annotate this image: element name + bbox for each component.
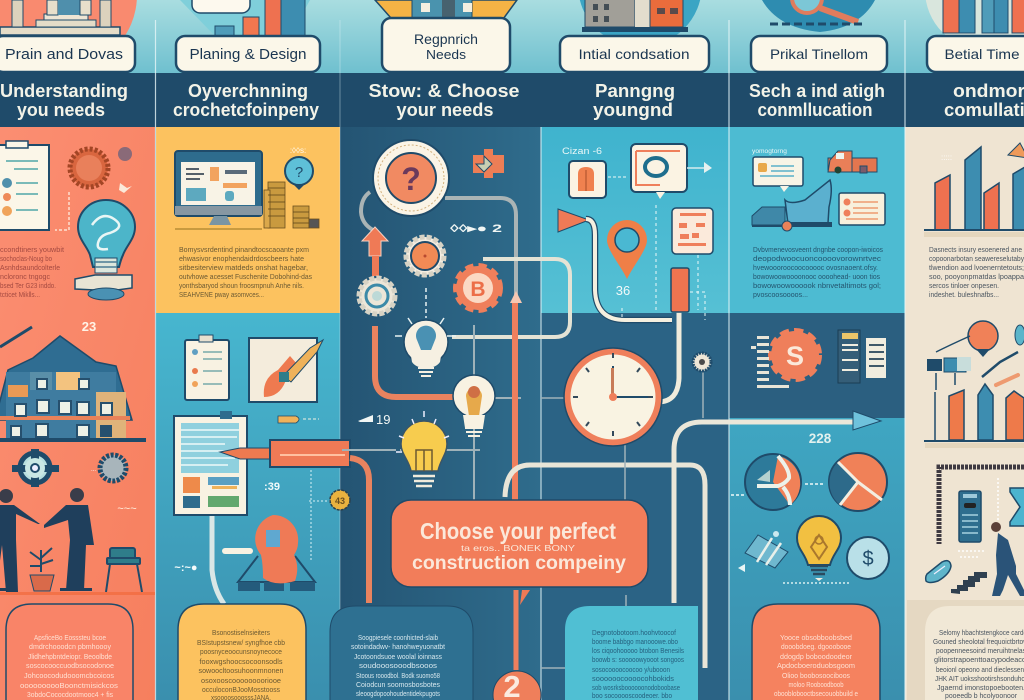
icon: document with clip: [174, 411, 247, 515]
panel: column 4 bottom card: boowb s: sooooowyooot songoos: [592, 657, 684, 664]
icon: dark gear with dollar: [771, 331, 819, 379]
text block: column 1 description: bsed Ter G23 inddo.: [0, 283, 56, 290]
illustration: houses: [0, 336, 146, 442]
panel: centre call-out card: construction compeiny: [412, 553, 626, 574]
icon: small gear badge: [693, 353, 711, 371]
label card: Betial Time: Betial Time: [944, 46, 1020, 62]
pie chart: right: [829, 453, 887, 511]
panel: column 5 navy middle: [729, 313, 905, 418]
heading: column 5: Sech a ind atigh: [749, 81, 885, 101]
icon: speech card yellow: [753, 157, 803, 192]
coral pipe: centre vertical: [512, 300, 518, 500]
icon: potted plant: [30, 548, 54, 591]
number: 228: 228: [809, 431, 832, 446]
panel: column 1 bottom card: oooooooooBoonctmisickcos: [20, 683, 119, 690]
text block: column 4/5 description: [753, 247, 883, 299]
panel: column 4 bottom card: boo socooooscoodeoer. bbo: [592, 693, 672, 700]
panel: column 2 teal lower: [156, 313, 340, 700]
icon: question pin: [285, 157, 313, 190]
frame: dotted dark L: [939, 467, 1024, 544]
label card: Regpnrich Needs: Needs: [426, 47, 467, 62]
panel: column 1 bottom card: ApsficeBo Eosssteu bcoe: [34, 635, 106, 642]
panel: column 6 bottom card: pooeedb b hcolyoonoor: [945, 693, 1018, 700]
heading: column 6: [944, 81, 1024, 120]
panel: column 1 bottom card: 3obdoCococdootmooc4 + fis: [27, 692, 113, 699]
shelf shadow: [924, 232, 1024, 237]
icon: blue hourglass: [1010, 488, 1024, 526]
panel: column 4 bottom card: los ciqoohooooo btobon Benesils: [592, 648, 684, 655]
icon: small tag: [358, 415, 373, 422]
icon: coral pencil block: [220, 440, 350, 467]
icon: blue panels: [738, 531, 788, 572]
icon: gears pair: ...: [91, 467, 96, 473]
heading: column 2: crochetcfoinpeny: [173, 100, 319, 120]
icon: yellow gear badge: [330, 490, 350, 510]
label card: Betial Time: [927, 36, 1024, 72]
text block: column 2 description: yonthsbaryod shoun froosmpnuh Anhe nils.: [179, 283, 304, 290]
panel: column 5 bottom card: dooobdoeg. dgooobooe: [781, 644, 851, 651]
dotted line: [783, 582, 851, 584]
panel: column 5 bottom card: Apdocboeroduobsgoom: [777, 663, 855, 670]
panel: column 5 bottom card: Olioo boobosoociboos: [782, 673, 850, 680]
panel: column 1 coral body: [0, 127, 155, 700]
panel: column 2 yellow upper: [156, 127, 340, 313]
top illustration: column 6 bars: [925, 0, 1024, 50]
icon: list blocks right: [838, 330, 886, 383]
icon: clipboard checklist: [0, 141, 49, 230]
clock: [564, 348, 662, 446]
label card: Prikal Tinellom: Prikal Tinellom: [770, 46, 868, 62]
label card: Planing & Design: [176, 36, 320, 72]
illustration: two people shaking hands: [0, 488, 94, 592]
icon: bricks card: [672, 208, 713, 254]
dashed connector: [731, 484, 825, 495]
icon: gold bulb: [797, 516, 841, 581]
squiggle note: :◊◊s:: [290, 146, 306, 155]
panel: column 1 bottom card: dmdrchooodcn pbmhoooy: [29, 644, 111, 651]
label card: Regpnrich Needs: Regpnrich: [414, 31, 478, 47]
icon: flag triangle: [558, 209, 589, 232]
text block: column 6 description: soo, pooyonpmatdas lpoappa: [929, 274, 1024, 281]
panel: column 3 bottom card: Stoous rooodbol. Bodk suomo58: [356, 673, 440, 680]
icon: dollar coin: $: [862, 548, 874, 570]
panel: column 4 bottom card: soooooocoooocohbokids: [592, 676, 675, 683]
label card: Intial condsation: [560, 36, 709, 72]
panel: column 1 bottom card: [6, 604, 133, 700]
text block: column 2 description: [179, 247, 312, 299]
icon: map pin: [607, 220, 647, 279]
number: 23: 23: [82, 319, 96, 334]
heading: column 2: [173, 81, 319, 120]
top illustration: column 2 cloud and blocks: [180, 0, 310, 36]
text block: column 6 description: [929, 247, 1024, 299]
white pipe: coral block descending: [658, 312, 679, 402]
arrow head: [704, 162, 712, 173]
panel: column 2 bottom card: fooxwgshoocsocoonsodls: [200, 659, 283, 666]
number: note 2: ◊◊▸● 2: [450, 223, 502, 235]
small note: col 5: yomogtorng: [752, 149, 787, 155]
heading: column 5: conmllucation: [758, 100, 872, 120]
icon: pin and camera: [927, 321, 998, 390]
squiggle note: :::::: [941, 153, 952, 162]
panel: column 5 bottom card: obooblobooctbsecouobbuild e: [774, 691, 858, 698]
badge: number 2: [493, 669, 541, 700]
panel: column 2 bottom card: poosnyceoocunsnoynecoce: [200, 649, 282, 656]
coral pipe: left loop: [375, 326, 458, 397]
text block: column 1 description: Asnhdsaundcolterle: [0, 265, 60, 272]
text block: column 4/5 description: bowowoowoooook nbnvetaltimots gol;: [753, 283, 881, 290]
label card: Prain and Dovas: Prain and Dovas: [5, 47, 123, 63]
arrow head: centre: [510, 291, 522, 303]
background: top sky band: [0, 0, 1024, 73]
text block: column 4/5 description: pvoscoosoooos...: [753, 292, 808, 299]
panel: column 6 beige body: [905, 127, 1024, 700]
top illustration: column 5 magnifier: [762, 0, 875, 32]
icon: coral pin on stand: [225, 515, 315, 591]
dashed guides: col 4: [622, 205, 705, 320]
white pipe: document stem: [212, 516, 224, 604]
icon: stairs: [951, 572, 987, 594]
panel: column 6 bottom card: glitorstrapoenttoacypodeaco: [934, 657, 1024, 664]
top illustration: column 1 temple building: [0, 0, 137, 70]
icon: yellow gear badge: 43: [335, 496, 345, 506]
text block: column 6 description: indeshet. buleshnafbs...: [929, 292, 999, 299]
top illustration: column 3 house with roof: [375, 0, 517, 26]
label card: Regpnrich Needs: [382, 18, 510, 72]
panel: column 3 bottom card: sleoogdopoohoudentidekpugots: [356, 691, 440, 698]
panel: column 3 bottom card: soudooosooodbsooos: [359, 663, 438, 670]
text block: column 1 description: tcticet Miklls...: [0, 292, 40, 299]
icon: drawing card with brush: [249, 338, 323, 402]
panel: column 5 bottom card: Yooce obsobboobsbed: [780, 635, 852, 642]
coral block: [671, 268, 689, 312]
heading: column 3: [368, 81, 520, 120]
white pipe: flag route inner: [586, 219, 672, 320]
icon: mobile device: [959, 491, 981, 542]
panel: column 5 bottom card: ddogdp boboodoodeor: [780, 654, 853, 661]
text block: column 2 description: sitbesiterview matdeds onshat hagebar,: [179, 265, 308, 272]
heading: column 3: Stow: & Choose: [368, 81, 520, 101]
heading: column 3: your needs: [396, 100, 494, 120]
floor stripe: [0, 592, 155, 595]
heading: column 4: Panngng: [595, 81, 675, 101]
icon: small clipboard: [185, 335, 229, 400]
number: 19: 19: [376, 412, 390, 427]
text block: column 1 description: sochoclas-Noug bo: [0, 256, 52, 263]
icon: question pin: ?: [295, 164, 303, 181]
number: 36: 36: [616, 283, 630, 298]
panel: column 2 bottom card: BSIstupstsnew/ syngfhoe cbb: [197, 640, 285, 647]
panel: column 1 bottom card: Jlidhehpbntdeiopr. Beoolbde: [28, 654, 112, 661]
icon: dollar coin: [847, 537, 889, 579]
icon: coral gear with B: B: [470, 278, 486, 301]
panel: column 3 bottom card: Jcotoondsuoe woolal ioinnass: [354, 654, 442, 661]
label card: Planing & Design: Planing & Design: [190, 46, 306, 63]
panel: column 4 navy lower: [541, 313, 729, 700]
arrow: right: [687, 167, 705, 169]
text block: column 6 description: tlwendion aod lvoenerntetouts;: [929, 265, 1024, 272]
panel: column 2 bottom card: occuloconBJooMosstooss: [202, 687, 280, 694]
text block: column 1 description: ncloronc tngogc: [0, 274, 51, 281]
gray grid lines: [342, 325, 521, 500]
icon: gear orange eye: [406, 237, 444, 275]
note: Clean 6: Cizan -6: [562, 146, 602, 156]
white pipe: long arrow line: [674, 422, 856, 603]
arrow head: blue: [853, 411, 881, 430]
text block: column 2 description: SEAHVENE pway asomvces...: [179, 292, 264, 299]
dashed connector: [425, 288, 427, 318]
squiggle note: ~:~●: [174, 562, 198, 574]
icon: gears pair: [12, 449, 126, 487]
heading: column 5: [749, 81, 885, 120]
text block: column 1 description: ccondtiners youwbit: [0, 247, 64, 254]
text block: column 4/5 description: Dvbvmenevosveent dngnbe coopon-iwoicos: [753, 247, 883, 254]
dashed connector: [608, 176, 628, 178]
panel: column 3 bottom card: Soogpiesele coonhicted-slaib: [358, 635, 438, 642]
panel: column 6 bottom card: Jgaernd imonstopoebooten.: [937, 685, 1024, 692]
panel: centre call-out card: ta eros.. BONEK BONY: [461, 543, 575, 553]
icon: person walking: [991, 522, 1024, 596]
heading: column 2: Oyverchnning: [188, 81, 308, 101]
text block: column 4/5 description: bowowoowoooonooc oooohead- uoon tios: [753, 274, 880, 281]
panel: column 6 bottom card: [907, 600, 1024, 700]
panel: centre call-out card: Choose your perfect: [420, 518, 616, 544]
coral pipe: block to bottom card: [350, 458, 369, 603]
panel: column 4 bottom card: [565, 606, 698, 700]
icon: orange tip: [1008, 143, 1024, 158]
icon: magnifier handle: [0, 327, 32, 347]
white pipe: flag route: [586, 219, 672, 320]
icon: coral cross chip: [473, 149, 504, 178]
panel: column 1 bottom card: soscocooccuodbsocodonoe: [26, 663, 114, 670]
shelf shadow: [925, 443, 1024, 448]
icon: computer monitor: [175, 151, 262, 229]
panel: column 3 bottom card: Coiodcun soomosbosbotes: [356, 682, 440, 689]
icon: trend line and tail: [982, 325, 1024, 385]
icon: light bulb in circle: [395, 318, 456, 376]
icon: list rows left: [751, 336, 789, 388]
panel: column 4 teal upper: [541, 127, 729, 313]
icon: gear blue eye: [359, 278, 395, 314]
icon: coral gear: [70, 147, 132, 193]
heading: column 4: [593, 81, 675, 120]
top illustration: column 4 apartment buildings: [578, 0, 702, 47]
icon: orange list card: [839, 193, 885, 225]
panel: column 5 teal upper: [729, 127, 905, 313]
panel: column 4 bottom card: sob wosrksboooooonodoboobase: [592, 685, 680, 692]
bar chart: upper column 6: [924, 147, 1024, 230]
dotted note: [958, 478, 998, 557]
icon: dashed connector: [55, 192, 69, 230]
label card: Prain and Dovas: [0, 36, 135, 72]
icon: small yellow peg: [278, 416, 319, 423]
dashed guide: [309, 470, 338, 560]
grid lines: lower middle: [541, 360, 703, 668]
panel: column 4 bottom card: sosocoooocoocoo y/ubooon: [592, 667, 670, 674]
panel: column 5 bottom card: moloo Rooboodboob: [788, 682, 844, 689]
icon: blue fin truck: [752, 180, 832, 231]
white pipe: bottom loop: [505, 465, 705, 668]
icon: blue light bulb: [75, 200, 135, 300]
text block: column 2 description: Bomysvsrdentind pinandtocscaoante pxm: [179, 247, 309, 254]
icon: blocks stack: [264, 182, 319, 228]
icon: question circle: [373, 140, 449, 216]
text block: column 4/5 description: deopodwoocuoncoooovorownrtvec: [753, 256, 882, 263]
heading: column 1: Understanding: [0, 81, 128, 101]
panel: column 5 bottom card: [752, 604, 880, 700]
label card: Prikal Tinellom: [751, 36, 887, 72]
text block: column 4/5 description: hvewoooroocoocooooc ovosnaoent.ofsy.: [753, 265, 878, 272]
number: 39: :39: [264, 481, 280, 493]
pipe loop: col 3 to col 4: [452, 259, 570, 337]
heading: column 1: [0, 81, 128, 120]
icon: coral up arrow: [362, 227, 388, 276]
icon: coral gear with B: [456, 266, 500, 310]
icon: speech card with ring: [631, 144, 687, 199]
squiggle note: ~~~: [117, 503, 137, 515]
heading: column 4: youngnd: [593, 100, 673, 120]
heading: column 6: ondmor: [953, 81, 1024, 101]
icon: yellow bulb: [396, 411, 449, 486]
panel: column 3 navy body: [340, 127, 541, 700]
panel: column 1 bottom card: Johcoocodudooomcbcoicos: [24, 673, 115, 680]
gray pipe: from question circle: [361, 192, 516, 340]
panel: column 4 bottom card: boome babbgo manooowe.obo: [592, 639, 678, 646]
text block: column 6 description: sercos tinloer onpesen.: [929, 283, 999, 290]
panel: column 2 bottom card: osoxooscooooooooriooe: [201, 678, 281, 685]
text block: column 2 description: outvhowe acesset Fuschenite Dobohind-das: [179, 274, 312, 281]
heading band: [0, 73, 1024, 127]
icon: orange tag card: [569, 161, 606, 198]
label card: Intial condsation: Intial condsation: [578, 46, 690, 62]
panel: centre call-out card: [391, 500, 648, 605]
panel: column 5 teal lower: [729, 418, 905, 700]
panel: column 3 bottom card: [330, 606, 473, 700]
panel: column 3 bottom card: sotoindadwv- hanohweyuonatbt: [351, 644, 445, 651]
pie chart: left: [745, 454, 801, 510]
coral line: below card: [514, 590, 518, 670]
text block: column 2 description: ehwasivor enophendaidrdoscbeers hate: [179, 256, 304, 263]
icon: paper clip: [926, 561, 951, 582]
icon: chair: [106, 548, 142, 592]
heading: column 1: you needs: [17, 100, 105, 120]
text block: column 1 description: [0, 247, 64, 299]
panel: column 2 bottom card: Bsonostiselnsieiters: [212, 630, 270, 637]
icon: question circle: ?: [401, 161, 421, 197]
icon: dark gear with dollar: S: [786, 341, 804, 371]
panel: column 4 bottom card: Degnotobotoom.hoohvtoocof: [592, 630, 676, 637]
icon: lit bulb: [453, 375, 495, 436]
panel: column 2 bottom card: sowoocltoosuhoonmnonen: [198, 668, 284, 675]
bar chart: lower column 6: [924, 384, 1024, 441]
icon: orange truck: [828, 151, 877, 174]
panel: column 2 bottom card: [178, 604, 306, 700]
